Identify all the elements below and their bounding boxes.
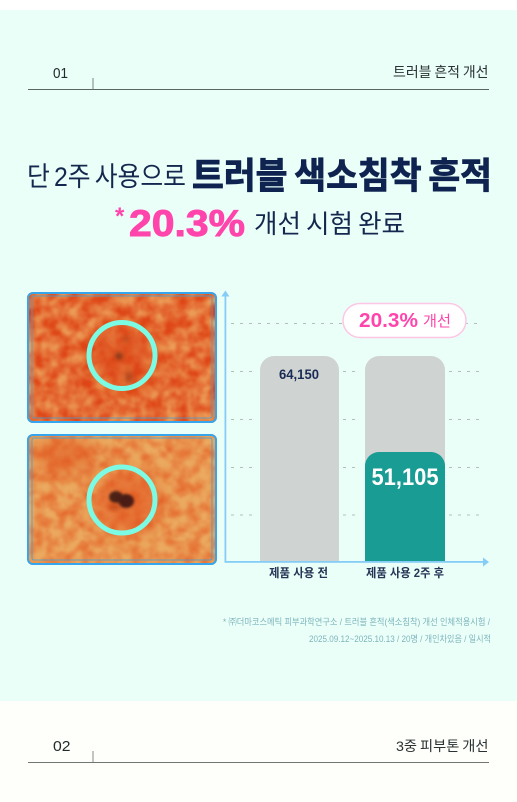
bar: after background xyxy=(365,356,445,562)
title: 20.3% xyxy=(129,203,245,244)
axis label: after: 제품 사용 2주 후 xyxy=(366,565,444,580)
section header 02 xyxy=(28,738,489,762)
title: 트러블 색소침착 흔적 xyxy=(192,155,492,196)
title: 개선 시험 완료 xyxy=(254,209,405,239)
bar chart xyxy=(221,290,489,580)
callout: 20.3% improvement xyxy=(343,304,466,338)
icon: highlight circle before xyxy=(89,322,155,388)
callout: 20.3% improvement: 20.3% xyxy=(359,310,418,332)
value: 64,150: 64,150 xyxy=(279,366,319,382)
bar: before xyxy=(260,356,339,562)
photo: skin after xyxy=(27,434,217,565)
axis label: before: 제품 사용 전 xyxy=(269,565,328,580)
footnote: 2025.09.12~2025.10.13 / 20명 / 개인차있음 / 일시적 xyxy=(309,633,491,644)
axes xyxy=(221,290,489,566)
value: 51,105: 51,105 xyxy=(372,464,438,491)
section header 01: 01 xyxy=(53,65,68,82)
section header 01: 트러블 흔적 개선 xyxy=(393,64,488,80)
callout: 20.3% improvement: 개선 xyxy=(423,313,451,330)
title xyxy=(27,155,492,244)
icon: highlight circle after xyxy=(89,467,155,533)
section header 02: 02 xyxy=(53,738,70,755)
title: 단 2주 사용으로 xyxy=(27,162,186,192)
footnote: * ㈜더마코스메틱 피부과학연구소 / 트러블 흔적(색소침착) 개선 인체적용시험 / xyxy=(223,616,490,627)
section header 01 xyxy=(28,64,489,90)
panel: section 02 background xyxy=(0,701,517,802)
section header 02: 3중 피부톤 개선 xyxy=(396,738,488,754)
footnote xyxy=(223,616,491,644)
title: * xyxy=(115,203,125,230)
bar: after value xyxy=(365,452,445,562)
photo: skin before xyxy=(27,292,217,423)
